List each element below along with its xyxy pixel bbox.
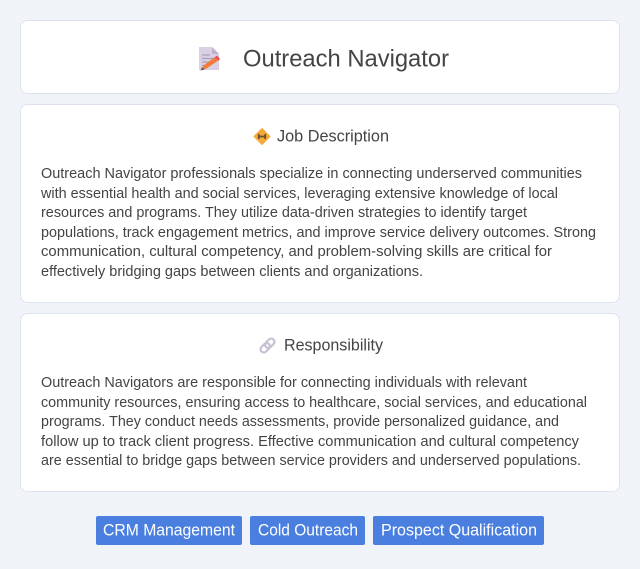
text block: responsibility: follow up to track client progress. Effective communication and cultural competency <box>41 434 580 450</box>
text block: job description: populations, track engagement metrics, and improve service delivery outcomes. Strong <box>41 225 596 241</box>
tag: Cold Outreach <box>250 516 365 545</box>
text block: job description: Outreach Navigator professionals specialize in connecting underserved communities <box>41 166 582 182</box>
heading text: Job Description <box>277 128 389 146</box>
heading: job description <box>254 128 389 146</box>
icon: chain link <box>259 337 276 354</box>
text block: responsibility: programs. They conduct needs assessments, provide personalized guidance, and <box>41 414 559 430</box>
panel: responsibility <box>20 314 620 492</box>
text block: responsibility: community resources, ensuring access to healthcare, social services, and educational <box>41 395 587 411</box>
tag: CRM Management: CRM Management <box>103 522 235 540</box>
skill tags <box>96 516 544 545</box>
text block: job description: communication, cultural competency, and problem-solving skills are critical for <box>41 244 552 260</box>
text block: responsibility: are essential to bridge gaps between service providers and underserved populations. <box>41 453 581 469</box>
tag: CRM Management <box>96 516 242 545</box>
panel: title <box>20 20 620 94</box>
icon: construction sign <box>254 128 270 144</box>
tag: Prospect Qualification: Prospect Qualification <box>381 522 537 540</box>
tag: Cold Outreach: Cold Outreach <box>258 522 358 540</box>
icon: document with pencil <box>199 47 220 70</box>
title text: Outreach Navigator <box>243 46 449 72</box>
text block: job description: resources and programs. They utilize data-driven strategies to identify target <box>41 205 527 221</box>
text block: responsibility <box>41 375 587 469</box>
heading: responsibility <box>259 336 384 354</box>
text block: job description: with essential health and social services, leveraging extensive knowledge of local <box>40 186 558 202</box>
tag: Prospect Qualification <box>373 516 544 545</box>
text block: job description: effectively bridging gaps between clients and organizations. <box>41 264 423 280</box>
text block: job description <box>40 166 596 280</box>
text block: responsibility: Outreach Navigators are responsible for connecting individuals with relevant <box>41 375 527 391</box>
heading text: Responsibility <box>284 336 384 354</box>
panel: job description <box>20 104 620 302</box>
